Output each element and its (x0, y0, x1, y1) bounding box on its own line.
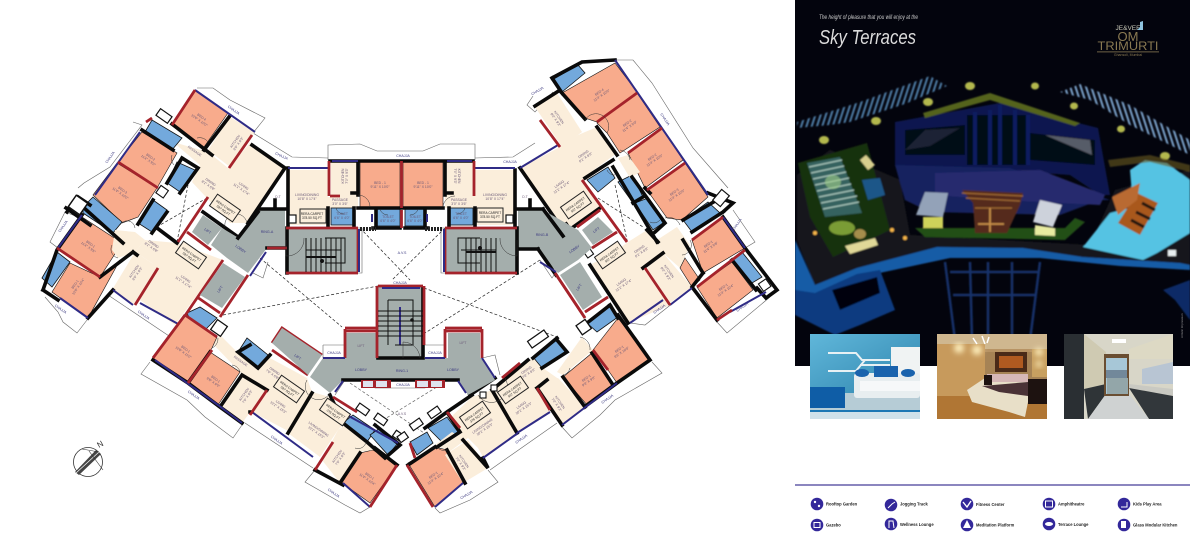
wing: lower left: 9'8" X 9'0" (206, 376, 221, 389)
wing: upper right: BED-1 (718, 283, 729, 292)
central stair and lobby: LIFT (358, 344, 364, 348)
wing: upper right: LIVING (616, 277, 627, 287)
logo: Om Trimurti: TRIMURTI (1098, 39, 1158, 53)
duct icons (68, 195, 88, 215)
RERA carpet boxes: 597 SQ.FT (280, 385, 295, 398)
wing: upper left: KITCHEN (229, 134, 241, 149)
wing: lower left: LIVING/DINING (308, 421, 330, 438)
logo: Om Trimurti: JE&VEE (1116, 25, 1141, 32)
lobby and stairs: left: LIFT (203, 227, 212, 235)
wing: upper right: LIVING (554, 179, 565, 189)
wing: upper right: DINING (577, 149, 589, 159)
wing: upper left: CHAJJA (54, 304, 68, 315)
amenity: fitness center: Fitness Center (976, 502, 1005, 507)
wing: lower right: LIVING/DINING (471, 418, 493, 435)
wing: upper left: 8'1" X 6'8" (144, 241, 159, 254)
wing: upper right: 11'4" X 10'4" (717, 283, 735, 298)
photo: kitchen (1064, 334, 1173, 419)
wing: upper left: 8'0" X 9'3" (232, 136, 245, 151)
wing: upper left: 11'4" X 9'0" (140, 154, 157, 167)
wing: top centre: CHAJJA (503, 160, 517, 164)
wing: lower right: BED-1 (581, 374, 592, 383)
amenities legend (810, 498, 1178, 532)
wing: upper right: LIFT (575, 283, 583, 292)
wing: lower left: CHAJJA (327, 488, 341, 499)
wing: top centre: BED - 1 (417, 181, 429, 185)
wing: top centre: KITCHEN (341, 169, 345, 183)
walls (520, 60, 777, 323)
amenity: amphitheatre (1043, 498, 1085, 510)
amenity: amphitheatre: Amphitheatre (1058, 502, 1085, 506)
wing: lower right: CHAJJA (515, 433, 529, 445)
RERA carpet boxes: 378 SQ.FT (326, 408, 341, 421)
amenity: meditation platform: Meditation Platform (976, 522, 1015, 528)
wing: upper left: KITCHEN (128, 264, 140, 279)
RERA carpet boxes: RERA CARPET (301, 212, 323, 216)
wing: top centre: 3'0" X 3'6" (332, 202, 348, 206)
central stair and lobby: CHAJJA (327, 351, 341, 355)
wing: upper right: 11'4" X 9'0" (622, 119, 638, 133)
ring road (795, 240, 1190, 295)
amenity: modular kitchen (1118, 519, 1178, 531)
central stair and lobby: RING-1 (396, 369, 408, 373)
amenity: fitness center (961, 498, 1005, 510)
amenity: modular kitchen: Glass Modular Kitchen (1133, 522, 1178, 528)
RERA carpet boxes: 378.50 SQ.FT (302, 216, 322, 220)
garden lights (813, 228, 907, 240)
wing: upper left: DINING (205, 177, 217, 187)
wing: upper right: 8'0" X 9'3" (659, 266, 672, 282)
wing: lower right: DINING (520, 365, 532, 375)
wing: top centre: 7'0" X 9'3" (345, 168, 349, 184)
wing: lower left: CHAJJA (187, 390, 201, 401)
wing: upper right: 11'4" X 9'6" (703, 240, 719, 254)
central stair and lobby: LOBBY (447, 368, 460, 372)
door arcs (111, 138, 247, 258)
wing: upper right: 11'1" X 17'4" (553, 180, 571, 195)
ring lights (819, 82, 1170, 160)
central stair and lobby (272, 281, 495, 395)
amenity: wellness lounge: Wellness Lounge (900, 522, 934, 527)
RERA carpet boxes: RERA CARPET (279, 380, 300, 396)
photo: bedroom (937, 334, 1047, 419)
RERA carpet boxes: 597 SQ.FT (216, 204, 231, 217)
panel: sky terraces night render (795, 0, 1190, 366)
wing: upper left: PASSAGE (187, 145, 203, 158)
amenity: terrace lounge (1043, 518, 1089, 530)
amenity: kids play area (1118, 498, 1162, 510)
wing: upper right: 11'1" X 17'4" (615, 278, 633, 293)
central stair and lobby: LIFT (293, 353, 302, 361)
amenity: kids play area: Kids Play Area (1133, 502, 1162, 506)
tagline: The height of pleasure that you will enjoy at the (819, 14, 918, 21)
divider (795, 484, 1190, 486)
wing: upper right: D.T (522, 195, 528, 199)
wing: upper left: BED-3 (117, 186, 128, 195)
wing: lower right: 9'8" X 9'0" (581, 375, 597, 388)
wing: upper left: 8'1" X 6'8" (201, 179, 216, 192)
wing: upper left: BED-1 (85, 240, 96, 249)
wing: upper left: 11'4" X 10'0" (111, 186, 130, 201)
wing: upper right: 11'4" X 10'0" (668, 188, 686, 203)
wing: upper right: BED-3 (669, 188, 680, 197)
wing: top centre: 6'6" X 4'0" (380, 219, 396, 223)
amenity: wellness lounge (885, 518, 934, 530)
wing: upper left: CHAJJA (227, 105, 241, 116)
RERA carpet boxes: RERA CARPET (325, 403, 346, 419)
pool (1083, 160, 1190, 260)
logo: Om Trimurti: Ghansoli, Mumbai (1114, 53, 1142, 57)
RERA carpet boxes: 597 SQ.FT (570, 201, 585, 214)
wing: top centre: A.V.S (398, 251, 407, 255)
wing: upper right: CHAJJA (653, 303, 667, 315)
wing: lower right: KITCHEN (554, 395, 566, 410)
wing: lower right: LIVING (516, 400, 527, 410)
wing: lower left: 7'0" X 9'3" (241, 389, 254, 404)
wing: upper left: LIVING (238, 181, 249, 191)
wing: top centre: 7'0" X 9'3" (453, 168, 457, 184)
RERA carpet boxes: RERA CARPET (502, 381, 523, 397)
wing: top centre: 9'11" X 10'0" (414, 185, 433, 189)
amenity: gazebo (811, 519, 841, 531)
amenity: terrace lounge: Terrace Lounge (1058, 522, 1089, 527)
wing: lower left: 7'0" X 6'8" (265, 368, 280, 381)
wing: top centre: PASSAGE (332, 198, 348, 202)
wing: upper right: CHAJJA (736, 301, 750, 313)
wing: upper left: BED-1 (71, 279, 80, 290)
wing: upper right: 8'0" X 9'3" (549, 112, 562, 128)
amenity: meditation platform (961, 519, 1015, 531)
wing: upper right: KITCHEN (553, 110, 565, 125)
wing: upper left: 11'4" X 9'6" (80, 241, 97, 254)
wing: upper left: 11'1" X 17'4" (232, 182, 251, 197)
amenity: rooftop garden: Rooftop Garden (826, 502, 858, 506)
central stair and lobby: LIFT (460, 341, 466, 345)
wing: upper left: BED-2 (145, 153, 156, 162)
walls (43, 117, 285, 318)
wing: upper left: LIVING (180, 274, 191, 284)
wing: top centre: TOILET (409, 215, 421, 219)
wing: top centre: 3'0" X 3'6" (451, 202, 467, 206)
RERA carpet boxes: RERA CARPET (464, 406, 485, 422)
wing: upper right: CHAJJA (531, 86, 545, 96)
wing: lower left (153, 315, 404, 507)
wing: top centre: LIVING/DINING (295, 193, 319, 197)
wing: top centre: KITCHEN (457, 169, 461, 183)
RERA carpet boxes: RERA CARPET (479, 211, 501, 215)
garden (798, 143, 890, 257)
wing: upper right: 11'4" X 10'0" (593, 88, 611, 103)
RERA carpet boxes: RERA CARPET (215, 199, 236, 215)
wing: lower left: 10'1" X 15'3" (269, 400, 288, 415)
central stair and lobby: CHAJJA (396, 383, 410, 387)
RERA carpet boxes: 378 SQ.FT (469, 411, 484, 424)
wing: lower right: CHAJJA (460, 490, 474, 500)
wing: upper right: 11'4" X 10'0" (646, 153, 664, 168)
wing: lower right: 9'8" X 10'8" (613, 345, 631, 359)
blue deck slab (895, 165, 1110, 215)
wing: upper right: LOBBY (568, 244, 581, 254)
rooms (173, 142, 285, 223)
RERA carpet boxes: 597 SQ.FT (182, 251, 197, 264)
RERA carpet boxes: 597 SQ.FT (604, 251, 619, 264)
wing: upper left: CHAJJA (58, 219, 69, 233)
RERA carpet boxes: RERA CARPET (181, 246, 202, 262)
right lift lobby (518, 210, 592, 273)
lobby and stairs: left: LIFT (216, 285, 224, 294)
wing: upper left: CHAJJA (137, 310, 151, 321)
RERA carpet boxes: RERA CARPET (599, 246, 620, 262)
wing: lower right: 10'1" X 15'3" (515, 401, 533, 416)
wing: top centre: 6'6" X 4'0" (334, 216, 350, 220)
wing: top centre: 6'6" X 4'0" (453, 216, 469, 220)
wing: top centre: PASSAGE (451, 198, 467, 202)
wing: upper right: BED-2 (647, 153, 658, 162)
wing: top centre: 6'6" X 4'0" (407, 219, 423, 223)
wing: upper right: KITCHEN (663, 264, 675, 279)
wing: top centre: 10'8" X 17'4" (297, 197, 317, 201)
balcony outlines (45, 60, 770, 513)
wing: top centre: TOILET (455, 212, 467, 216)
wing: lower left: KITCHEN (331, 449, 343, 464)
wing: upper right: BED-1 (703, 240, 714, 249)
wing: lower left: 11'4" X 10'4" (358, 472, 377, 487)
amenity: jogging track (885, 499, 928, 511)
wing: upper right: BED-2 (622, 119, 633, 128)
central stair and lobby: CHAJJA (393, 281, 407, 285)
amenity: gazebo: Gazebo (826, 522, 841, 528)
icon: north compass: N (96, 439, 105, 450)
disclaimer text: Artistic Impression (1180, 313, 1184, 338)
lobby and stairs: left: D.T (275, 195, 281, 199)
labels: BED-4 (196, 113, 207, 122)
wing: upper right: CHAJJA (659, 113, 671, 127)
lobby and stairs: left (192, 195, 359, 308)
wing: upper left: CHAJJA (274, 151, 289, 161)
wing: upper left: 11'1" X 17'4" (174, 275, 193, 290)
floor plan (40, 58, 780, 514)
wing: lower right: 11'4" X 10'4" (427, 471, 445, 486)
amenity: jogging track: Jogging Track (900, 502, 928, 506)
RERA carpet boxes: 378.50 SQ.FT (480, 215, 500, 219)
wing: lower left: PASSAGE (233, 355, 249, 368)
wing: upper right: RING-B (536, 233, 549, 237)
wing: lower left: BED-1 (180, 345, 191, 354)
labels: 10'6" X 10'0" (190, 113, 209, 128)
RERA carpet boxes: RERA CARPET (565, 196, 586, 212)
photo: living room (810, 334, 920, 419)
wing: top centre: 10'8" X 17'4" (485, 197, 505, 201)
amenity: rooftop garden (811, 498, 858, 510)
wing: lower right (397, 305, 650, 507)
wing: lower left: CHAJJA (270, 435, 284, 446)
icon: north compass (74, 439, 105, 476)
wing: upper left: 10'8" X 10'4" (71, 277, 86, 296)
wing: lower right: 10'1" X 15'3" (476, 422, 494, 437)
central stair and lobby: LOBBY (355, 368, 368, 372)
fence (797, 76, 947, 128)
wing: top centre: 9'11" X 10'0" (371, 185, 390, 189)
wing: top centre: LIVING/DINING (483, 193, 507, 197)
void dashed lines (160, 185, 643, 437)
rooftop scene (795, 76, 1190, 340)
logo: Om Trimurti: OM (1118, 29, 1138, 44)
wing: upper right: BED-4 (594, 88, 605, 97)
logo: Om Trimurti (1097, 25, 1159, 57)
wing: lower right: BED-1 (614, 345, 625, 354)
wing: upper left (42, 90, 289, 330)
lobby and stairs: left: RING-A (261, 230, 274, 234)
structure (945, 262, 1040, 340)
wing: upper right (444, 60, 777, 323)
wing: lower right: CHAJJA (601, 393, 615, 405)
central stair and lobby: CHAJJA (428, 351, 442, 355)
wing: lower left: KITCHEN (238, 387, 250, 402)
wing: lower right: A.V.S (398, 412, 407, 416)
wing: lower right: 7'0" X 9'3" (454, 456, 467, 472)
wing: lower right: BED-1 (428, 471, 439, 480)
wing: lower right: KITCHEN (458, 454, 470, 469)
wing: lower left: 10'1" X 15'3" (307, 425, 326, 440)
wing: top centre: TOILET (336, 212, 348, 216)
deck ground (797, 150, 1190, 285)
wing: upper left: CHAJJA (105, 150, 116, 164)
wing: top centre (288, 154, 517, 255)
wing: top centre: BED - 1 (374, 181, 386, 185)
wing: upper right: CHAJJA (732, 217, 743, 231)
RERA carpet boxes (176, 191, 625, 429)
wing: upper left: 8'0" X 9'3" (131, 266, 144, 281)
wing: lower right: 7'0" X 6'8" (521, 367, 537, 380)
RERA carpet boxes: 597 SQ.FT (507, 386, 522, 399)
wing: lower left: DINING (269, 366, 281, 376)
wing: upper right: 8'1" X 6'8" (634, 246, 650, 259)
wing: upper right: LIFT (592, 226, 601, 234)
roof tower (895, 103, 1110, 195)
wing: top centre: TOILET (382, 215, 394, 219)
lobby and stairs: left: LOBBY (235, 244, 247, 255)
wing: lower left: BED-1 (210, 375, 221, 384)
centre lawn and pergola (915, 218, 1085, 240)
wing: upper right: DINING (633, 244, 645, 254)
wing: upper left: DINING (148, 239, 160, 249)
wing: lower left: 7'0" X 9'3" (334, 451, 347, 466)
wing: lower right: 7'0" X 9'3" (550, 397, 563, 413)
wing: upper right: 8'1" X 6'8" (578, 151, 594, 164)
wing: lower left: 10'8" X 11'0" (174, 345, 193, 360)
wing: lower left: BED-1 (364, 472, 375, 481)
wing: lower left: LIVING (275, 399, 286, 409)
heading: Sky Terraces: Sky Terraces (819, 27, 916, 49)
wing: top centre: CHAJJA (396, 154, 410, 158)
